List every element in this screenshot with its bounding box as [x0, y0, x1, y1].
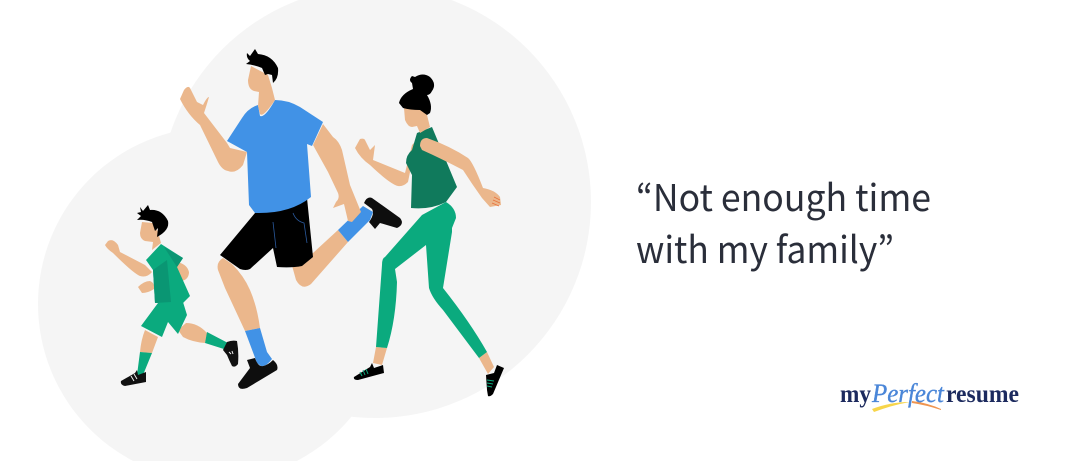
man hair [246, 49, 278, 83]
quote line 1: “Not enough time [636, 168, 931, 222]
logo: myPerfectResume [840, 379, 1019, 412]
man left arm and hand [180, 87, 247, 172]
boy shoes [121, 341, 238, 386]
boy shirt shading [153, 247, 183, 303]
woman ankles [373, 347, 494, 374]
man front shoe [238, 358, 278, 389]
boy hair [137, 205, 168, 237]
man rear leg [291, 230, 348, 287]
man shorts pocket lines [273, 213, 307, 248]
boy front leg [140, 330, 158, 353]
background blob [38, 0, 591, 461]
illustration: running woman [354, 74, 504, 396]
man right arm and hand [313, 124, 361, 222]
logo word Perfect: Perfect [871, 379, 945, 408]
boy shoe stripes [131, 351, 233, 381]
quote text [636, 168, 931, 274]
illustration: running man [180, 49, 402, 389]
woman shoes [354, 363, 504, 396]
boy back arm [175, 262, 189, 281]
woman back arm and hand [420, 138, 501, 207]
woman front arm and hand [355, 139, 417, 186]
logo swoosh orange [912, 401, 941, 410]
woman leggings [376, 202, 487, 358]
man rear sock [338, 206, 373, 242]
logo word my: my [840, 381, 871, 408]
boy face [140, 222, 161, 250]
man front sock [245, 328, 272, 366]
boy lower hand [138, 281, 154, 293]
boy raised arm [105, 240, 152, 276]
boy shorts [141, 302, 187, 337]
logo word resume: resume [946, 381, 1019, 408]
logo swoosh [872, 402, 910, 412]
man front leg [218, 258, 260, 331]
boy back leg [178, 323, 207, 343]
woman top [406, 127, 457, 208]
woman hair and bun [399, 74, 434, 115]
man rear shoe [364, 198, 402, 229]
woman head and neck [404, 108, 430, 133]
boy shirt [146, 244, 190, 303]
man shirt [227, 100, 323, 213]
man head and neck [248, 66, 275, 115]
woman fingernails [492, 197, 500, 206]
quote line 2: with my family” [636, 220, 894, 274]
woman shoe laces [360, 369, 494, 387]
illustration: running boy [105, 205, 238, 386]
man shorts [220, 198, 313, 270]
boy socks [137, 332, 228, 375]
